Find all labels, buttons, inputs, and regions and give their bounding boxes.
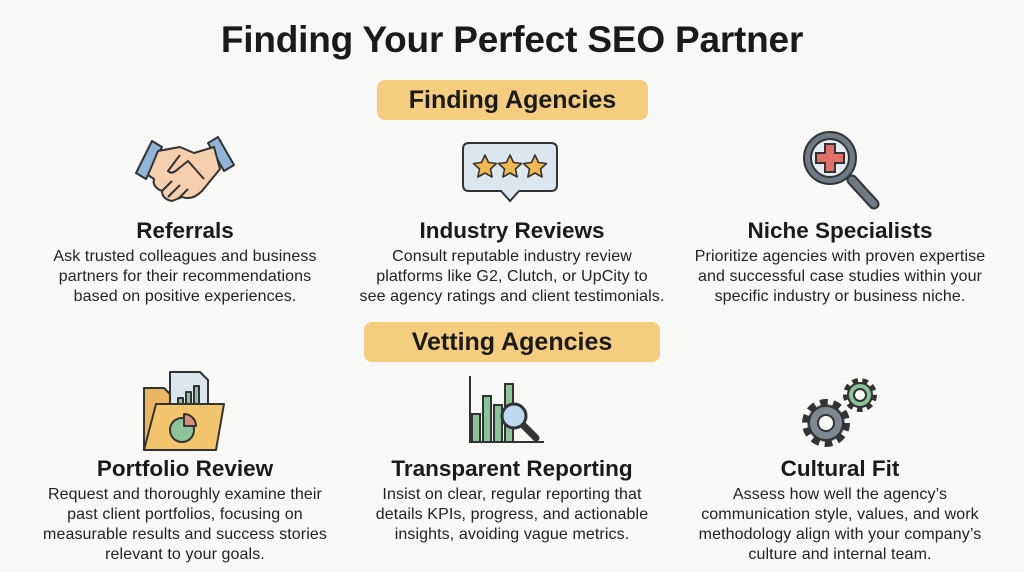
- card: referrals: based on positive experiences.: [74, 288, 296, 305]
- card: cultural fit: methodology align with your company’s: [699, 526, 981, 543]
- card: industry reviews: [360, 218, 664, 305]
- card: niche specialists: Prioritize agencies with proven expertise: [695, 248, 985, 265]
- card: referrals: Referrals: [136, 218, 234, 243]
- card: transparent reporting: [376, 456, 648, 543]
- card: portfolio review: relevant to your goals.: [105, 546, 265, 563]
- icon: portfolio folder: [143, 371, 225, 451]
- card: transparent reporting: details KPIs, progress, and actionable: [376, 506, 648, 523]
- icon: gears: [802, 378, 877, 447]
- card: referrals: Ask trusted colleagues and business: [53, 248, 317, 265]
- card: portfolio review: [43, 456, 327, 563]
- icon: bar chart with magnifier: [469, 376, 544, 443]
- card: transparent reporting: Transparent Reporting: [391, 456, 633, 481]
- card: industry reviews: Industry Reviews: [419, 218, 605, 243]
- card: portfolio review: Portfolio Review: [97, 456, 273, 481]
- card: portfolio review: Request and thoroughly examine their: [48, 486, 322, 503]
- card: portfolio review: measurable results and success stories: [43, 526, 327, 543]
- card: portfolio review: past client portfolios, focusing on: [67, 506, 303, 523]
- card: cultural fit: Cultural Fit: [781, 456, 899, 481]
- icon: handshake: [135, 136, 235, 202]
- card: transparent reporting: Insist on clear, regular reporting that: [382, 486, 642, 503]
- card: niche specialists: and successful case studies within your: [698, 268, 982, 285]
- card: cultural fit: culture and internal team.: [748, 546, 932, 563]
- card: cultural fit: Assess how well the agency’s: [733, 486, 947, 503]
- icon: review stars bubble: [462, 142, 558, 202]
- card: niche specialists: Niche Specialists: [747, 218, 933, 243]
- section header: finding agencies: [377, 80, 648, 120]
- card: cultural fit: communication style, values, and work: [701, 506, 979, 523]
- card: industry reviews: platforms like G2, Clutch, or UpCity to: [376, 268, 648, 285]
- section header: vetting agencies: Vetting Agencies: [412, 328, 612, 356]
- card: referrals: partners for their recommendations: [59, 268, 311, 285]
- card: industry reviews: Consult reputable industry review: [392, 248, 632, 265]
- title: Finding Your Perfect SEO Partner: [221, 19, 803, 60]
- card: niche specialists: [695, 218, 985, 305]
- card: transparent reporting: insights, avoiding vague metrics.: [395, 526, 629, 543]
- icon: magnifier with cross: [803, 131, 880, 210]
- section header: finding agencies: Finding Agencies: [409, 86, 616, 114]
- card: referrals: [53, 218, 317, 305]
- card: cultural fit: [699, 456, 981, 563]
- card: industry reviews: see agency ratings and client testimonials.: [360, 288, 664, 305]
- section header: vetting agencies: [364, 322, 660, 362]
- card: niche specialists: specific industry or business niche.: [715, 288, 965, 305]
